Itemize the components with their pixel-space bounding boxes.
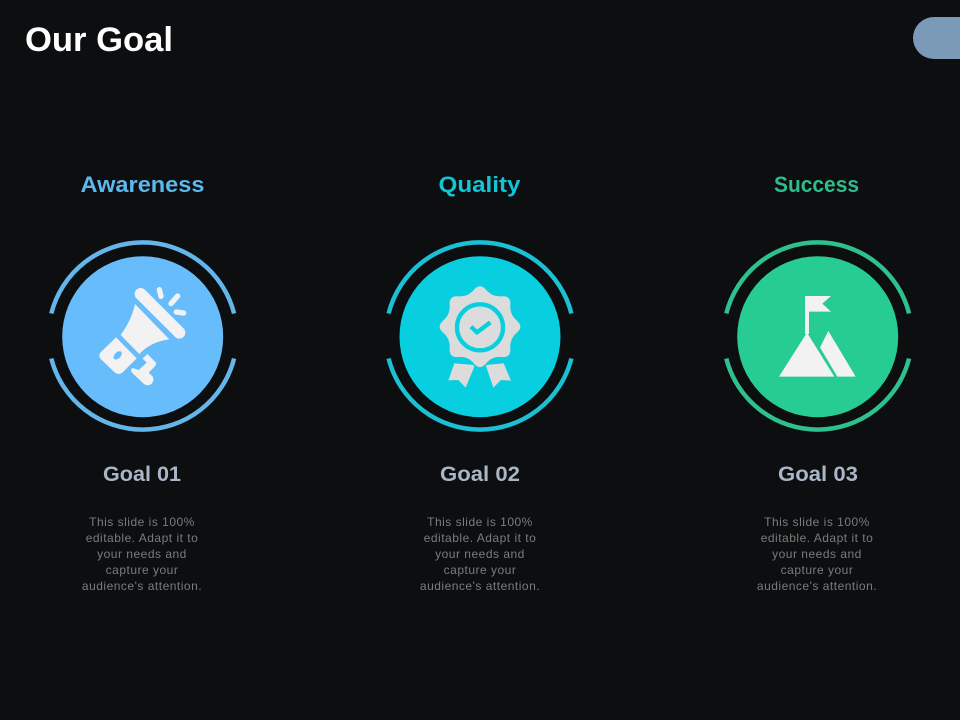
circle: quality — [400, 256, 560, 417]
title: Our Goal — [25, 21, 173, 59]
heading: quality: Quality — [438, 172, 521, 197]
text block: goal 03 description: This slide is 100% — [764, 515, 870, 529]
text block: goal 02 description: your needs and — [435, 547, 525, 561]
panel: awareness — [51, 172, 234, 593]
icon: mountain flag — [779, 296, 856, 377]
circle: success — [737, 256, 898, 417]
text block: goal 01 description: This slide is 100% — [89, 515, 195, 529]
ring: success — [726, 242, 909, 430]
panel: quality — [389, 172, 571, 593]
label: goal 01: Goal 01 — [103, 463, 181, 486]
text block: goal 01 description: audience's attention. — [82, 579, 202, 593]
heading: success: Success — [774, 172, 859, 197]
text block: goal 03 description: audience's attention. — [757, 579, 877, 593]
text block: goal 02 description: editable. Adapt it to — [424, 531, 536, 545]
text block: goal 03 description — [757, 515, 877, 593]
panel: success — [726, 172, 909, 593]
text block: goal 02 description: audience's attention. — [420, 579, 540, 593]
heading: awareness: Awareness — [80, 172, 204, 197]
icon: megaphone — [99, 290, 184, 385]
ring: awareness — [51, 242, 234, 430]
text block: goal 03 description: editable. Adapt it to — [761, 531, 873, 545]
decorative pill tab — [913, 17, 960, 59]
icon: award badge — [440, 286, 520, 388]
label: goal 02: Goal 02 — [440, 463, 520, 486]
ring: quality — [389, 242, 571, 430]
text block: goal 03 description: your needs and — [772, 547, 862, 561]
text block: goal 03 description: capture your — [781, 563, 853, 577]
circle: awareness — [62, 256, 223, 417]
text block: goal 02 description: This slide is 100% — [427, 515, 533, 529]
text block: goal 02 description: capture your — [444, 563, 516, 577]
label: goal 03: Goal 03 — [778, 463, 858, 486]
text block: goal 01 description: capture your — [106, 563, 178, 577]
text block: goal 02 description — [420, 515, 540, 593]
text block: goal 01 description — [82, 515, 202, 593]
text block: goal 01 description: your needs and — [97, 547, 187, 561]
text block: goal 01 description: editable. Adapt it to — [86, 531, 198, 545]
